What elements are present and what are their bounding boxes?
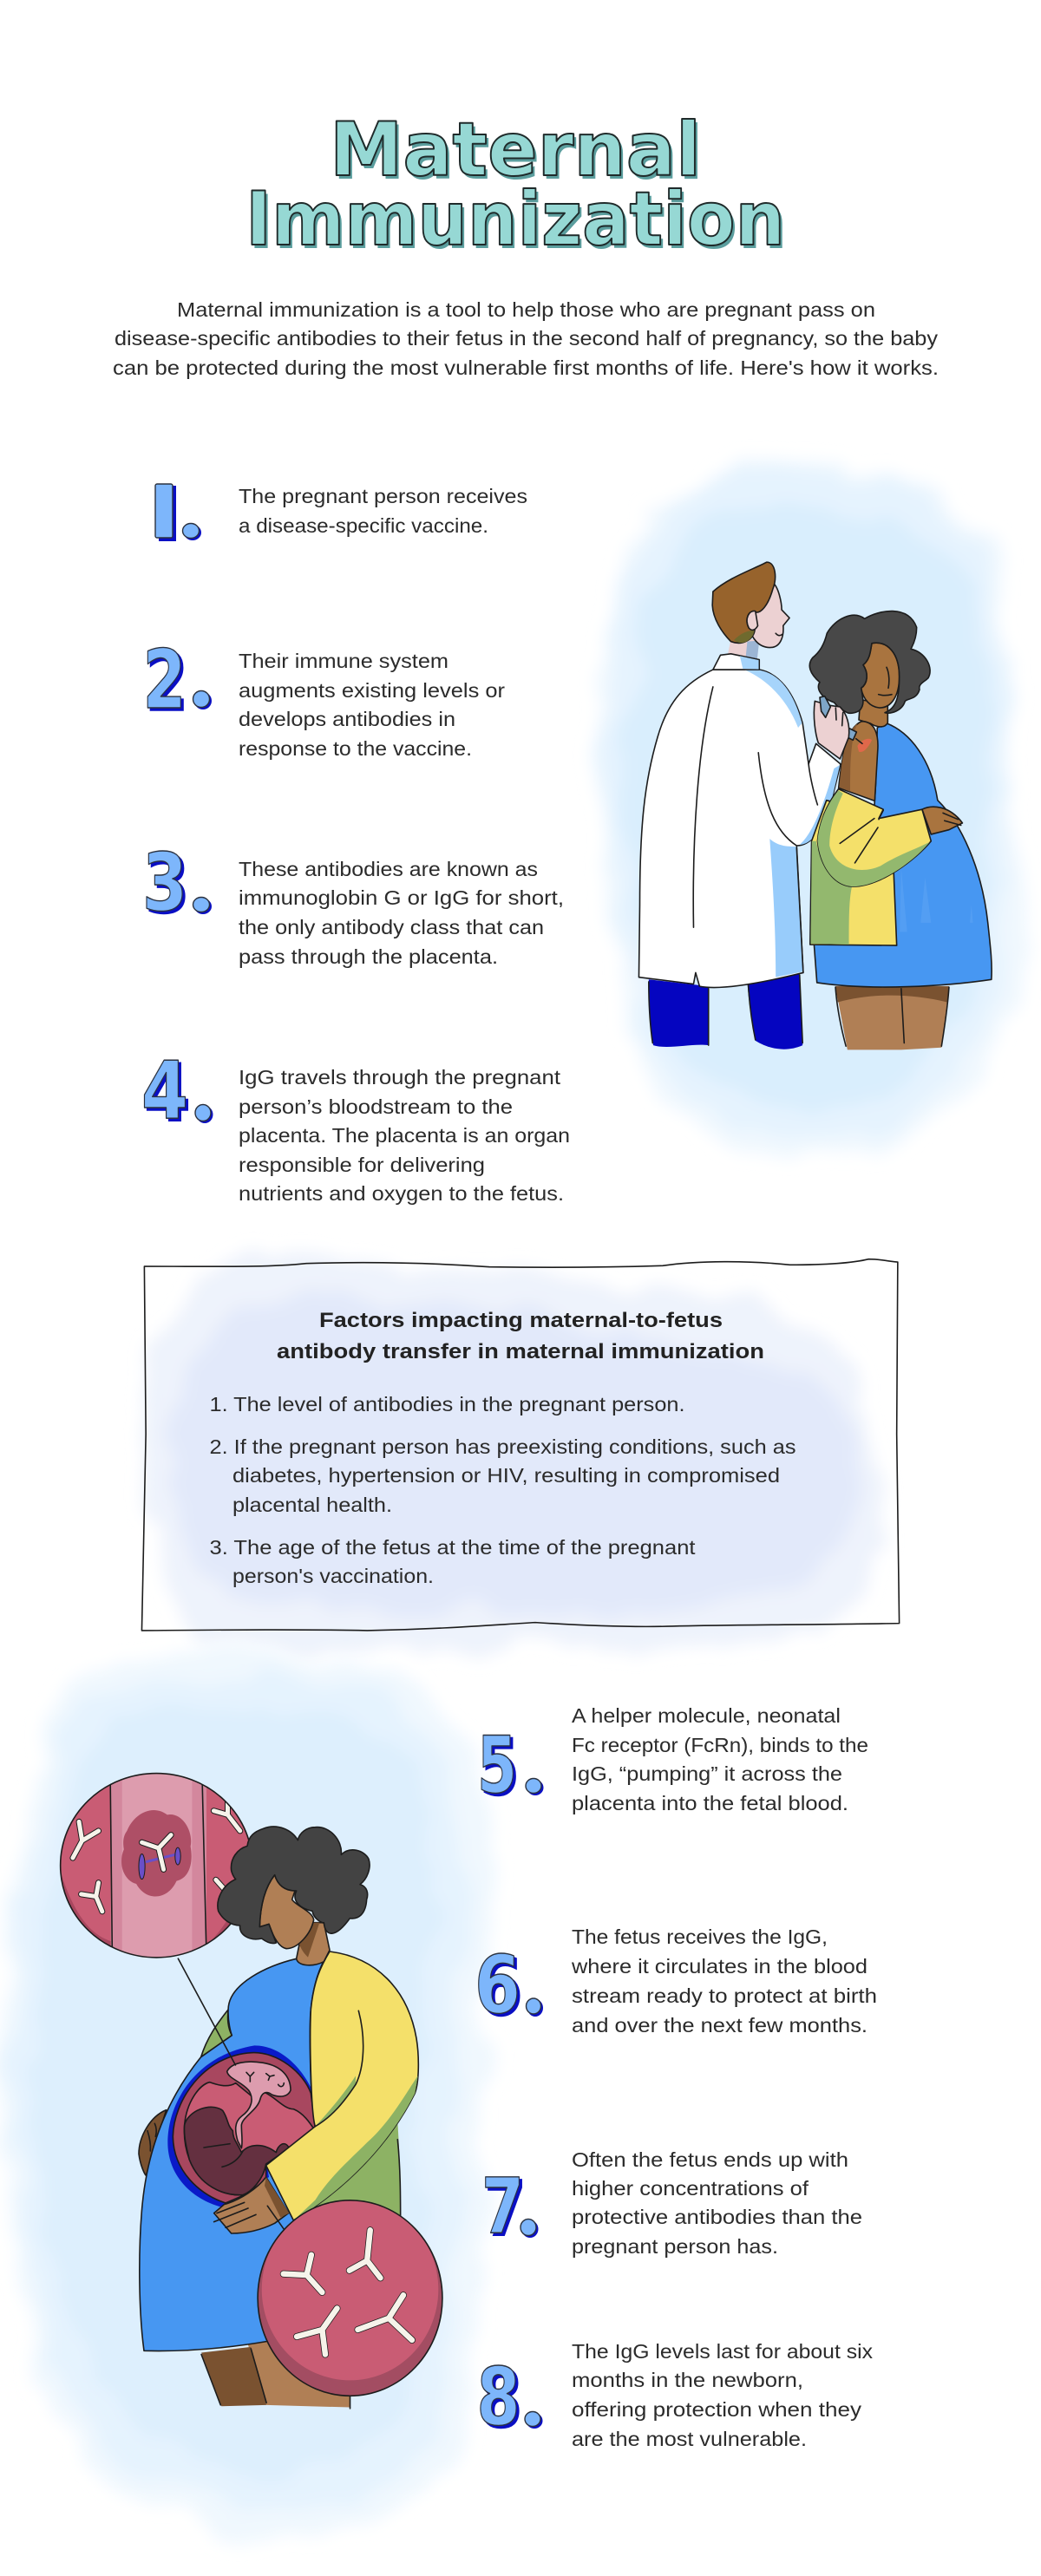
factors list: 3. The age of the fetus at the time of the pregnant	[210, 1536, 696, 1559]
intro text: can be protected during the most vulnerable first months of life. Here's how it works.	[113, 356, 939, 379]
placenta	[227, 2062, 291, 2148]
step 5 text: A helper molecule, neonatal	[572, 1704, 841, 1727]
receptor	[146, 1854, 178, 1862]
step 6 text: where it circulates in the blood	[571, 1955, 868, 1978]
trousers	[649, 972, 802, 1049]
step 7 text: Often the fetus ends up with	[572, 2148, 848, 2171]
doctor's hand with syringe	[814, 696, 862, 759]
hand-drawn frame	[141, 1259, 900, 1631]
numeral 1: 1	[157, 473, 172, 550]
step 6 text: stream ready to protect at birth	[572, 1984, 877, 2007]
step 4 text: placenta. The placenta is an organ	[239, 1124, 570, 1147]
back hand	[139, 2110, 167, 2175]
legs	[201, 2341, 350, 2409]
step 4	[141, 1044, 570, 1205]
panel heading	[277, 1309, 764, 1363]
face	[747, 583, 789, 648]
numeral 2: 2	[146, 636, 189, 730]
step 8 text: are the most vulnerable.	[572, 2428, 807, 2450]
green top	[292, 2114, 401, 2240]
pregnant person body	[814, 723, 992, 1049]
dress	[814, 723, 992, 987]
legs	[835, 986, 949, 1049]
illustration: doctor vaccinating pregnant person	[596, 462, 1025, 1159]
numeral 6: 6	[477, 1941, 523, 2034]
step 1 text	[239, 485, 527, 537]
step 8 text: The IgG levels last for about six	[572, 2340, 874, 2363]
step 2 text: augments existing levels or	[239, 679, 505, 702]
yellow sleeve	[266, 1952, 418, 2220]
hair	[218, 1827, 370, 1944]
numeral 7: 7	[484, 2164, 527, 2253]
numeral 8: 8	[479, 2353, 522, 2446]
step 2 text: develops antibodies in	[239, 708, 455, 730]
factors list	[210, 1393, 796, 1587]
step 5 text	[572, 1704, 868, 1814]
neck	[859, 700, 887, 727]
panel heading: Factors impacting maternal-to-fetus	[319, 1309, 723, 1332]
numeral 3: 3	[145, 839, 190, 932]
numeral 7: 7	[481, 2161, 524, 2251]
step 3 text: the only antibody class that can	[239, 916, 544, 938]
womb	[167, 2045, 315, 2207]
step 5 text: placenta into the fetal blood.	[572, 1792, 848, 1814]
title: Maternal	[330, 107, 701, 193]
step 4 text: responsible for delivering	[239, 1154, 485, 1176]
factors list: placental health.	[232, 1494, 392, 1516]
numeral 4: 4	[144, 1047, 191, 1140]
numeral 2: 2	[142, 633, 186, 728]
step 7 text: pregnant person has.	[572, 2235, 778, 2258]
placenta detail circle	[61, 1774, 248, 1957]
step 4 text	[239, 1066, 570, 1205]
intro text	[113, 298, 939, 379]
lab coat	[638, 670, 841, 988]
face	[259, 1875, 314, 1949]
woman's head, neck and shoulder	[809, 611, 930, 801]
step 7 text: protective antibodies than the	[572, 2206, 862, 2228]
vesicle	[121, 1810, 192, 1896]
numeral 4: 4	[141, 1044, 188, 1137]
numeral 8: 8	[477, 2350, 520, 2443]
hair	[809, 611, 930, 713]
step 5 text: Fc receptor (FcRn), binds to the	[572, 1734, 868, 1756]
step 3 text	[239, 858, 564, 968]
coat shading	[769, 839, 802, 977]
step 3 text: These antibodies are known as	[239, 858, 538, 880]
title	[246, 107, 788, 266]
front hand	[214, 2177, 289, 2233]
background wash	[596, 462, 1025, 1159]
factors list: person's vaccination.	[232, 1565, 434, 1587]
factors list: 1. The level of antibodies in the pregnant person.	[210, 1393, 685, 1415]
bare shoulder	[839, 722, 878, 801]
hair	[712, 562, 776, 643]
neck	[297, 1923, 330, 1965]
IgG detail circle	[256, 2197, 444, 2399]
face	[861, 643, 900, 708]
factors list: 2. If the pregnant person has preexisting conditions, such as	[210, 1435, 796, 1458]
step 8	[477, 2340, 874, 2450]
step 5 text: IgG, “pumping” it across the	[572, 1762, 842, 1785]
doctor	[638, 562, 841, 1049]
background wash	[0, 1651, 493, 2537]
numeral 3: 3	[142, 836, 187, 929]
numeral 6: 6	[475, 1939, 520, 2031]
collar	[713, 654, 759, 670]
hand on belly	[922, 807, 962, 834]
step 2 text	[239, 650, 505, 760]
step 3 text: immunoglobin G or IgG for short,	[239, 886, 564, 909]
step 6 text: and over the next few months.	[572, 2014, 868, 2037]
panel heading: antibody transfer in maternal immunization	[277, 1340, 764, 1363]
amniotic sac	[184, 2082, 315, 2195]
step 1	[155, 473, 527, 550]
step 5	[477, 1704, 868, 1814]
jacket	[810, 789, 931, 945]
callout line	[178, 1958, 235, 2065]
step 7	[481, 2148, 862, 2258]
step 8 text: offering protection when they	[572, 2398, 862, 2421]
numeral 5: 5	[480, 1723, 520, 1814]
step 4 text: IgG travels through the pregnant	[239, 1066, 561, 1089]
step 6 text	[571, 1925, 877, 2037]
step 1 text: The pregnant person receives	[239, 485, 527, 507]
fetus	[184, 2107, 289, 2195]
step 1 text: a disease-specific vaccine.	[239, 514, 488, 537]
title: Maternal	[332, 110, 704, 197]
intro text: Maternal immunization is a tool to help those who are pregnant pass on	[177, 298, 875, 321]
ear	[747, 611, 758, 630]
step 4 text: person’s bloodstream to the	[239, 1095, 513, 1118]
step 8 text	[572, 2340, 874, 2450]
step 6 text: The fetus receives the IgG,	[572, 1925, 828, 1948]
neck	[728, 639, 759, 660]
title: Immunization	[246, 176, 785, 263]
step 4 text: nutrients and oxygen to the fetus.	[239, 1182, 564, 1205]
injection site	[857, 739, 872, 752]
numeral 5: 5	[477, 1720, 517, 1811]
intro text: disease-specific antibodies to their fetus in the second half of pregnancy, so the baby	[115, 327, 939, 350]
factors list: diabetes, hypertension or HIV, resulting in compromised	[232, 1464, 780, 1487]
illustration: antibody transfer through the placenta	[0, 1651, 493, 2537]
step 3	[142, 836, 564, 968]
dress	[140, 1958, 324, 2351]
title: Immunization	[248, 180, 788, 266]
step 2 text: Their immune system	[239, 650, 448, 672]
step 2 text: response to the vaccine.	[239, 737, 472, 760]
step 7 text	[572, 2148, 862, 2258]
step 7 text: higher concentrations of	[572, 2177, 809, 2200]
step 6	[475, 1925, 877, 2037]
factors panel	[141, 1253, 900, 1650]
step 3 text: pass through the placenta.	[239, 945, 498, 968]
step 8 text: months in the newborn,	[572, 2369, 803, 2391]
panel wash	[142, 1253, 883, 1650]
step 2	[142, 633, 505, 760]
